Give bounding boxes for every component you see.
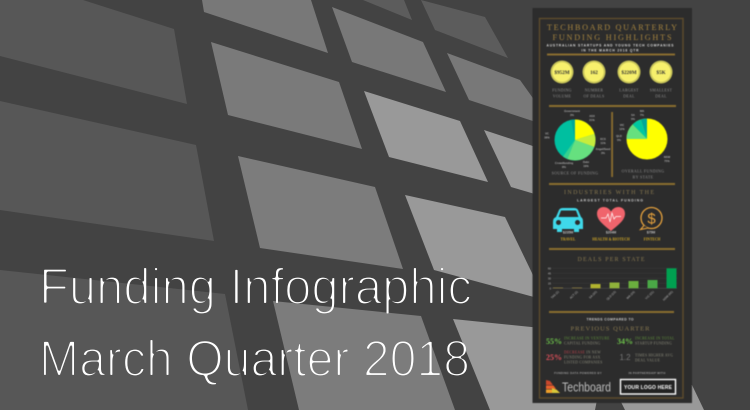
bar chart: deals per state: 30 — [548, 276, 551, 280]
pie chart: source of funding: 3% — [570, 113, 575, 117]
industries heading: INDUSTRIES WITH THE — [564, 190, 654, 196]
pie chart: overall funding by state — [616, 109, 671, 180]
heading: previous quarter: TRENDS COMPARED TO — [586, 318, 634, 322]
industry values and labels: HEALTH & BIOTECH — [592, 238, 630, 242]
stat circles: DEAL — [623, 94, 635, 98]
pie chart: overall funding by state: VIC — [620, 123, 624, 127]
logo: Techboard: Techboard — [562, 380, 611, 394]
trend stats: DEAL VALUE — [635, 358, 661, 362]
trend stats: CAPITAL FUNDING — [564, 342, 600, 346]
stat circles — [550, 60, 673, 98]
pie chart: source of funding: 19% — [583, 164, 589, 168]
industry values and labels: $75M — [647, 230, 655, 234]
trend stats: LISTED COMPANIES — [564, 360, 603, 364]
industries heading: LARGEST TOTAL FUNDING — [577, 198, 643, 202]
bar chart: deals per state: NSW (60) — [662, 290, 674, 302]
pie chart: overall funding by state: 75% — [664, 159, 670, 163]
bar chart: deals per state: 45 — [548, 271, 551, 275]
pie chart: overall funding by state: SA — [631, 113, 635, 117]
trend stats: INCREASE IN VENTURE — [564, 336, 610, 340]
icon: car (travel) — [553, 208, 583, 232]
industry values and labels: $204M — [606, 230, 616, 234]
pie chart: source of funding — [544, 109, 611, 176]
bar chart: deals per state: TAS (2) — [550, 290, 560, 300]
stat circles: LARGEST — [619, 88, 639, 92]
poster heading: TECHBOARD QUARTERLY — [547, 23, 677, 32]
pie chart: overall funding by state: 5% — [617, 138, 622, 142]
heading: deals per state: DEALS PER STATE — [578, 257, 645, 263]
bar chart: deals per state: WA (19) — [626, 290, 636, 300]
trend stats: TIMES HIGHER AVG — [635, 354, 673, 358]
pie chart: source of funding: 8% — [562, 165, 567, 169]
pie chart: overall funding by state: 5% — [631, 117, 636, 121]
trend stats: FUNDING FOR ASX — [564, 356, 601, 360]
pie chart: source of funding: 3% — [601, 151, 606, 155]
pie chart: source of funding: 21% — [589, 118, 595, 122]
industry values and labels: $235M — [563, 230, 573, 234]
bar chart: deals per state: 60 — [548, 266, 551, 270]
bar chart: deals per state: SA (10) — [588, 290, 598, 300]
pie chart: source of funding: Government — [564, 109, 580, 113]
logo placeholder: your logo here: YOUR LOGO HERE — [624, 385, 673, 391]
poster heading: FUNDING HIGHLIGHTS — [552, 33, 672, 42]
pie chart: source of funding: VC — [545, 132, 549, 136]
pie chart: source of funding: ECS — [600, 137, 606, 141]
trend stats: 55% — [546, 337, 562, 346]
stat circles: $952M — [554, 69, 570, 76]
stat circles: $220M — [621, 69, 637, 76]
stat circles: OF DEALS — [584, 94, 604, 98]
pie chart: overall funding by state: BY STATE — [633, 174, 654, 180]
stat circles: VOLUME — [553, 94, 572, 98]
pie chart: source of funding: ASX — [589, 114, 595, 118]
trend stats: INCREASE IN TOTAL — [635, 336, 675, 340]
credits captions — [554, 371, 666, 375]
pie chart: source of funding: Debt — [583, 160, 589, 164]
stat circles: NUMBER — [585, 88, 603, 92]
pie chart: source of funding: 11% — [600, 141, 606, 145]
trend stats: 25% — [546, 353, 562, 362]
trend stats: STARTUP FUNDING — [635, 342, 672, 346]
title: Funding Infographic March Quarter 2018: Funding Infographic — [39, 258, 472, 315]
pie chart: overall funding by state: NSW — [664, 155, 671, 159]
industries heading — [564, 190, 654, 202]
poster heading: IN THE MARCH 2018 QTR — [582, 48, 639, 52]
panel: infographic poster — [532, 8, 692, 403]
pie chart: source of funding: Angel/Seed — [596, 147, 611, 151]
industry values and labels: TRAVEL — [561, 238, 576, 242]
stat circles: $5K — [656, 69, 666, 76]
icon: heart (health and biotech) — [597, 207, 625, 231]
trend stats: DECREASE IN NEW — [564, 350, 601, 354]
stat circles: 162 — [590, 70, 598, 76]
credits captions: IN PARTNERSHIP WITH — [628, 371, 666, 375]
stat circles: FUNDING — [552, 88, 572, 92]
stat circles: SMALLEST — [650, 88, 673, 92]
bar chart: deals per state: ACT (2) — [569, 290, 579, 300]
pie chart: overall funding by state: OVERALL FUNDING — [622, 168, 664, 174]
title: Funding Infographic March Quarter 2018 — [39, 258, 472, 387]
trend stats: 1.2 — [619, 353, 631, 362]
icon: dollar speech bubble (fintech) — [640, 208, 662, 230]
credits captions: FUNDING DATA POWERED BY — [554, 371, 602, 375]
industry values and labels: FINTECH — [644, 238, 661, 242]
bar chart: deals per state: VIC (21) — [644, 290, 655, 300]
pie chart: source of funding: Crowdfunding — [555, 161, 573, 165]
pie chart: source of funding: SOURCE OF FUNDING — [552, 170, 598, 176]
icon: dollar speech bubble (fintech): $ — [647, 210, 656, 228]
title: Funding Infographic March Quarter 2018: March Quarter 2018 — [39, 330, 470, 387]
trend stats: 34% — [617, 337, 633, 346]
trend stats — [546, 336, 675, 364]
pie chart: overall funding by state: 12% — [619, 127, 625, 131]
bar chart: deals per state — [548, 266, 678, 302]
stat circles: DEAL — [655, 94, 667, 98]
bar chart: deals per state: 0 — [549, 286, 551, 290]
pie chart: source of funding: 38% — [544, 136, 550, 140]
pie chart: overall funding by state: 7% — [640, 113, 645, 117]
pie chart: overall funding by state: WA — [640, 109, 644, 113]
industry values and labels — [561, 230, 661, 242]
logo: Techboard — [546, 380, 611, 394]
poster heading — [546, 23, 677, 52]
logo placeholder: your logo here — [620, 380, 676, 394]
heading: previous quarter — [570, 318, 650, 332]
bar chart: deals per state: 15 — [548, 281, 551, 285]
bar chart: deals per state: QLD (13) — [605, 290, 617, 301]
poster heading: AUSTRALIAN STARTUPS AND YOUNG TECH COMPANIES — [546, 44, 674, 48]
heading: previous quarter: PREVIOUS QUARTER — [570, 326, 650, 332]
pie chart: overall funding by state: QLD — [616, 134, 622, 138]
